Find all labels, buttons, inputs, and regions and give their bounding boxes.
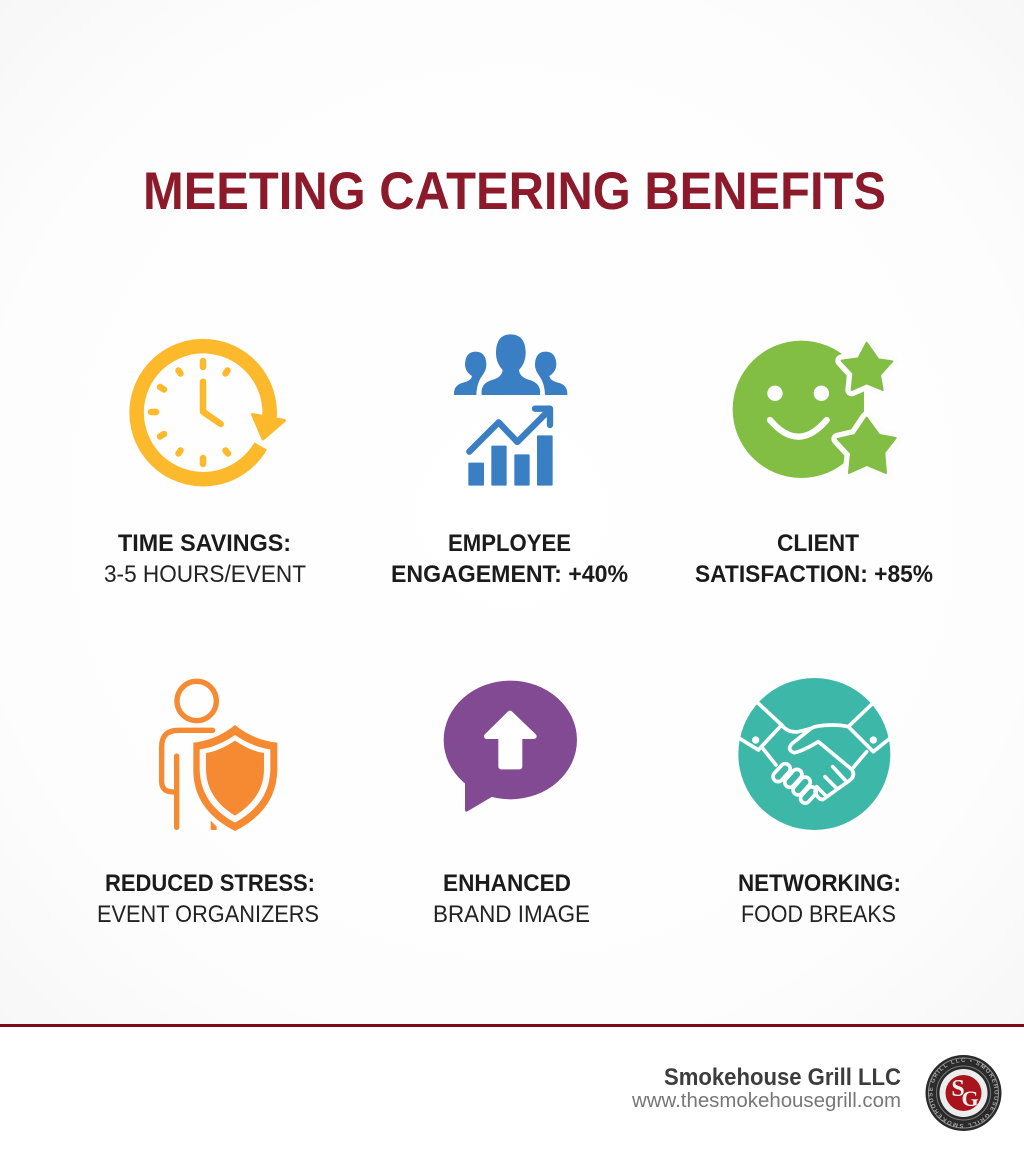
bar chart	[468, 435, 553, 486]
icon: clock with arrow	[137, 346, 284, 479]
footer	[0, 1024, 1024, 1131]
label: networking: NETWORKING:	[738, 870, 901, 897]
logo: G	[961, 1086, 979, 1111]
label: employee engagement: ENGAGEMENT: +40%	[391, 561, 628, 588]
label: client satisfaction: SATISFACTION: +85%	[695, 561, 933, 588]
label: time savings: TIME SAVINGS:	[118, 530, 291, 557]
label: reduced stress: REDUCED STRESS:	[105, 870, 315, 897]
label: client satisfaction	[695, 530, 933, 588]
label: enhanced brand image	[433, 870, 590, 928]
title: MEETING CATERING BENEFITS	[143, 162, 886, 221]
website: www.thesmokehousegrill.com	[631, 1090, 901, 1112]
logo: SMOKEHOUSE GRILL LLC • SMOKEHOUSE GRILL	[928, 1058, 999, 1128]
label: networking: FOOD BREAKS	[741, 901, 896, 928]
icon: handshake	[738, 678, 890, 830]
label: networking	[738, 870, 901, 928]
label: enhanced brand image: ENHANCED	[443, 870, 571, 897]
logo: S	[951, 1076, 965, 1102]
label: time savings: 3-5 HOURS/EVENT	[104, 561, 306, 588]
icon: smiley with stars	[733, 341, 896, 478]
people	[454, 334, 567, 395]
label: time savings	[104, 530, 306, 588]
label: employee engagement: EMPLOYEE	[448, 530, 571, 557]
icon: speech bubble with up arrow	[444, 681, 577, 812]
label: enhanced brand image: BRAND IMAGE	[433, 901, 590, 928]
label: client satisfaction: CLIENT	[777, 530, 859, 557]
company name: Smokehouse Grill LLC	[664, 1064, 901, 1091]
label: reduced stress	[97, 870, 319, 928]
label: employee engagement	[391, 530, 628, 588]
label: reduced stress: EVENT ORGANIZERS	[97, 901, 319, 928]
icon: team and growth chart	[454, 334, 567, 486]
trend arrow	[469, 409, 550, 452]
icon: person with shield	[162, 681, 277, 831]
